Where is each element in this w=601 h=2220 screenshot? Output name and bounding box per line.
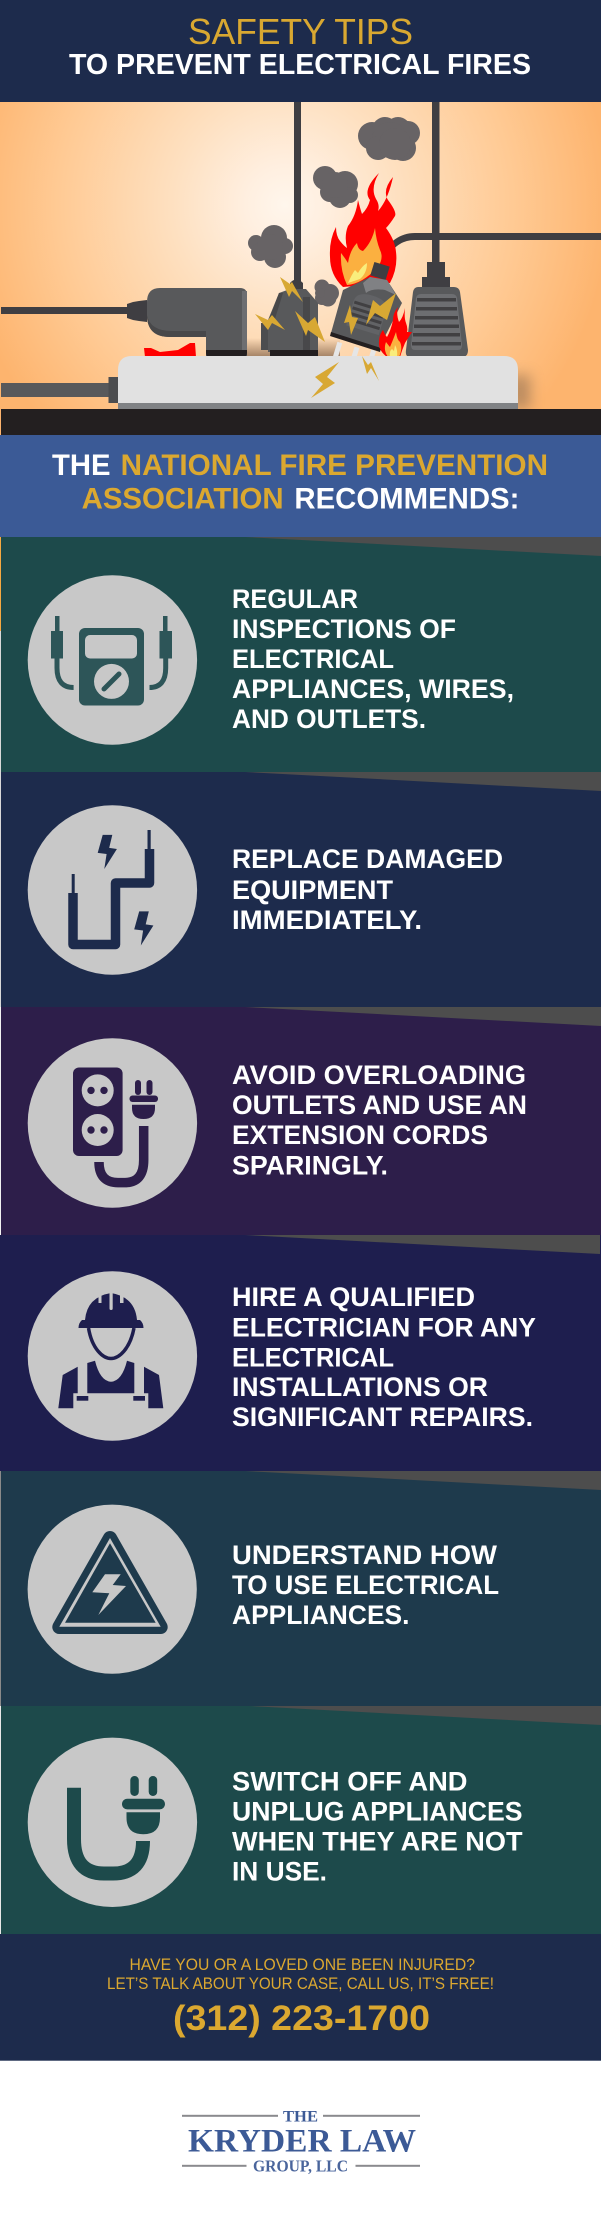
logo: The Kryder Law Group: GROUP, LLC [253, 2157, 348, 2176]
panel: avoid overloading [0, 1007, 601, 1235]
text: regular inspections: ELECTRICAL [232, 644, 394, 674]
text: switch off and unplug: UNPLUG APPLIANCES [232, 1797, 522, 1827]
banner: NFPA recommends: RECOMMENDS: [294, 482, 519, 516]
banner: NFPA recommends: NATIONAL FIRE PREVENTION [121, 449, 548, 482]
text: understand appliances: APPLIANCES. [232, 1600, 410, 1630]
panel: switch off and unplug [0, 1706, 601, 1934]
plug: left angled [127, 300, 147, 322]
icon: multimeter [28, 575, 197, 745]
text: avoid overloading: AVOID OVERLOADING [232, 1060, 526, 1090]
text: switch off and unplug: IN USE. [232, 1857, 327, 1887]
text: hire an electrician: HIRE A QUALIFIED [232, 1282, 475, 1312]
panel: hire an electrician [0, 1235, 601, 1471]
text: regular inspections: APPLIANCES, WIRES, [232, 674, 514, 704]
plug: burning [330, 262, 402, 359]
banner: NFPA recommends: THE [52, 449, 110, 482]
power strip [1, 356, 518, 409]
big flame [330, 173, 396, 287]
text: switch off and unplug: WHEN THEY ARE NOT [232, 1827, 522, 1857]
floor [1, 409, 601, 435]
header: title: SAFETY TIPS [188, 11, 413, 52]
text: hire an electrician: SIGNIFICANT REPAIRS. [232, 1402, 533, 1432]
text: hire an electrician: INSTALLATIONS OR [232, 1372, 488, 1402]
text: understand appliances [232, 1540, 499, 1630]
logo: The Kryder Law Group: THE [283, 2109, 318, 2126]
illustration: burning power strip [0, 102, 601, 435]
text: regular inspections: REGULAR [232, 584, 358, 614]
icon: unplug [28, 1738, 197, 1907]
text: replace damaged equipment: IMMEDIATELY. [232, 905, 422, 935]
text: hire an electrician: ELECTRICIAN FOR ANY [232, 1312, 536, 1342]
text: replace damaged equipment: REPLACE DAMAGED [232, 844, 503, 874]
banner: NFPA recommends [0, 435, 601, 537]
text: replace damaged equipment: EQUIPMENT [232, 875, 393, 905]
text: switch off and unplug [232, 1767, 522, 1887]
text: regular inspections: INSPECTIONS OF [232, 614, 456, 644]
header: title [0, 0, 601, 102]
call to action: LET’S TALK ABOUT YOUR CASE, CALL US, IT’S FREE! [107, 1974, 494, 1993]
small flame [379, 307, 412, 357]
text: understand appliances: UNDERSTAND HOW [232, 1540, 497, 1570]
cords [1, 102, 601, 314]
text: hire an electrician [232, 1282, 536, 1432]
red scrap [144, 343, 196, 357]
panel: replace damaged equipment [0, 772, 601, 1007]
plug: right upright [406, 262, 468, 357]
icon: damaged wire [28, 805, 197, 975]
panel: regular inspections [0, 537, 601, 772]
text: avoid overloading [232, 1060, 527, 1180]
icon: electrician [28, 1271, 197, 1441]
logo: The Kryder Law Group [182, 2109, 420, 2176]
text: replace damaged equipment [232, 844, 503, 935]
call to action: HAVE YOU OR A LOVED ONE BEEN INJURED? [130, 1955, 475, 1974]
panel: understand appliances [0, 1471, 601, 1706]
icon: warning triangle [28, 1505, 197, 1674]
text: understand appliances: TO USE ELECTRICAL [232, 1570, 499, 1600]
text: regular inspections [232, 584, 514, 734]
banner: NFPA recommends: ASSOCIATION [82, 482, 284, 516]
plug: centre [261, 280, 318, 357]
text: avoid overloading: SPARINGLY. [232, 1150, 388, 1180]
text: avoid overloading: OUTLETS AND USE AN [232, 1090, 527, 1120]
header: title: TO PREVENT ELECTRICAL FIRES [69, 49, 531, 81]
icon: outlet and plug [28, 1038, 197, 1208]
text: hire an electrician: ELECTRICAL [232, 1342, 394, 1372]
logo: The Kryder Law Group: KRYDER LAW [188, 2124, 416, 2160]
smoke clouds [248, 117, 420, 306]
text: switch off and unplug: SWITCH OFF AND [232, 1767, 468, 1797]
call to action [0, 1934, 601, 2061]
text: regular inspections: AND OUTLETS. [232, 704, 426, 734]
lightning bolts [255, 277, 396, 398]
text: avoid overloading: EXTENSION CORDS [232, 1120, 488, 1150]
call to action: (312) 223-1700 [173, 1998, 430, 2038]
